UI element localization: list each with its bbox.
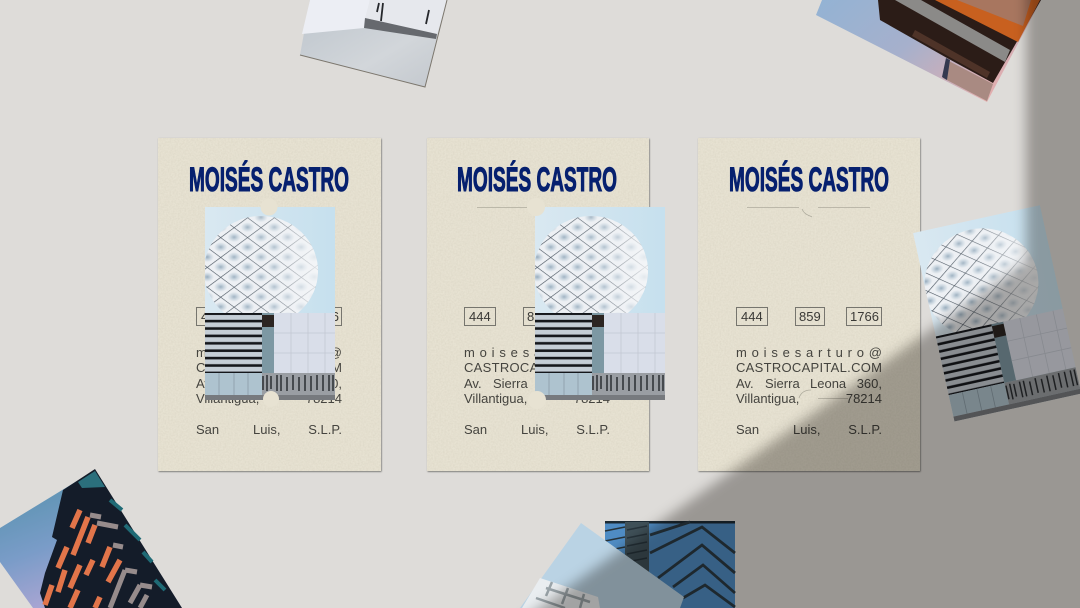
photo: bottom glass tower xyxy=(605,521,735,608)
card 3 contact details: Sierra xyxy=(765,376,800,391)
card 2 phone number xyxy=(464,308,610,326)
card 1 contact details: 360, xyxy=(317,376,342,391)
card 2 notches xyxy=(527,198,546,409)
card 3 contact details: Luis, xyxy=(793,422,820,437)
card 1 photo insert xyxy=(204,207,335,400)
card 3 contact details: Villantigua, xyxy=(736,391,799,406)
card 3 contact details: 360, xyxy=(857,376,882,391)
card 1 notches xyxy=(260,198,279,407)
card 1 phone number: 859 xyxy=(259,309,281,324)
card 1 contact details: S.L.P. xyxy=(308,422,342,437)
card 1 name heading: MOISÉS CASTRO xyxy=(189,161,349,199)
card 2 contact details: Villantigua, xyxy=(464,391,527,406)
card 3 contact details: S.L.P. xyxy=(848,422,882,437)
card 2 contact details: S.L.P. xyxy=(576,422,610,437)
card 1 phone number: 444 xyxy=(201,309,223,324)
panel: card 2 xyxy=(427,138,665,471)
card 2 name heading: MOISÉS CASTRO xyxy=(457,161,617,199)
card 1 contact details: moisesarturo@ xyxy=(196,345,342,360)
card 2 contact details: Leona xyxy=(538,376,575,391)
photo: top concrete plaza xyxy=(300,0,447,87)
card 3 phone number: 1766 xyxy=(850,309,879,324)
card 1 phone number: 1766 xyxy=(310,309,339,324)
card 2 rule xyxy=(477,206,527,208)
card 3 phone number: 444 xyxy=(741,309,763,324)
card 2 contact details: CASTROCAPITAL.COM xyxy=(464,360,610,375)
card 3 contact details: 78214 xyxy=(846,391,882,406)
card 2 phone number: 859 xyxy=(527,309,549,324)
photo: bottom left tower xyxy=(0,469,182,608)
photo: bottom sky and white building xyxy=(520,523,684,608)
card 1 paper xyxy=(158,138,381,471)
card 2 contact details: San xyxy=(464,422,487,437)
card 3 phone number xyxy=(736,308,882,326)
card 1 grain xyxy=(158,138,381,471)
card 1 contact details: Leona xyxy=(270,376,307,391)
card 1 contact details: CASTROCAPITAL.COM xyxy=(196,360,342,375)
card 1 contact details xyxy=(196,345,342,437)
card 3 phone number: 859 xyxy=(799,309,821,324)
card 3 contact details: Leona xyxy=(810,376,847,391)
card 1 phone number xyxy=(196,308,342,326)
card 1 contact details: Av. xyxy=(196,376,214,391)
card 2 contact details: Sierra xyxy=(493,376,528,391)
card 1 contact details: Sierra xyxy=(225,376,260,391)
card 2 contact details xyxy=(464,345,610,437)
card 2 paper xyxy=(427,138,649,471)
card 1 contact details: Luis, xyxy=(253,422,280,437)
card 3 rules and notch marks xyxy=(747,208,870,398)
card 2 contact details: Av. xyxy=(464,376,482,391)
card 3 contact details: moisesarturo@ xyxy=(736,345,882,360)
panel: card 3 xyxy=(698,138,920,471)
card 3 contact details: San xyxy=(736,422,759,437)
card 1 contact details: Villantigua, xyxy=(196,391,259,406)
card 3 paper xyxy=(698,138,920,471)
card 1 contact details: 78214 xyxy=(306,391,342,406)
photo: top right orange building xyxy=(816,0,1041,102)
card 1 contact details: San xyxy=(196,422,219,437)
card 2 phone number: 444 xyxy=(469,309,491,324)
card 2 photo insert xyxy=(534,207,665,400)
card 2 contact details: moisesarturo@ xyxy=(464,345,610,360)
card 3 grain xyxy=(698,138,920,471)
card 3 contact details: Av. xyxy=(736,376,754,391)
card 3 name heading: MOISÉS CASTRO xyxy=(729,161,889,199)
card 2 phone number: 1766 xyxy=(578,309,607,324)
card 2 contact details: Luis, xyxy=(521,422,548,437)
photo: tilted dome building on right xyxy=(912,205,1080,422)
window light shadow overlay xyxy=(527,0,1080,608)
card 3 contact details: CASTROCAPITAL.COM xyxy=(736,360,882,375)
card 2 contact details: 78214 xyxy=(574,391,610,406)
card 2 grain xyxy=(427,138,649,471)
card 3 contact details xyxy=(736,345,882,437)
card 2 contact details: 360, xyxy=(585,376,610,391)
panel: card 1 xyxy=(158,138,381,471)
